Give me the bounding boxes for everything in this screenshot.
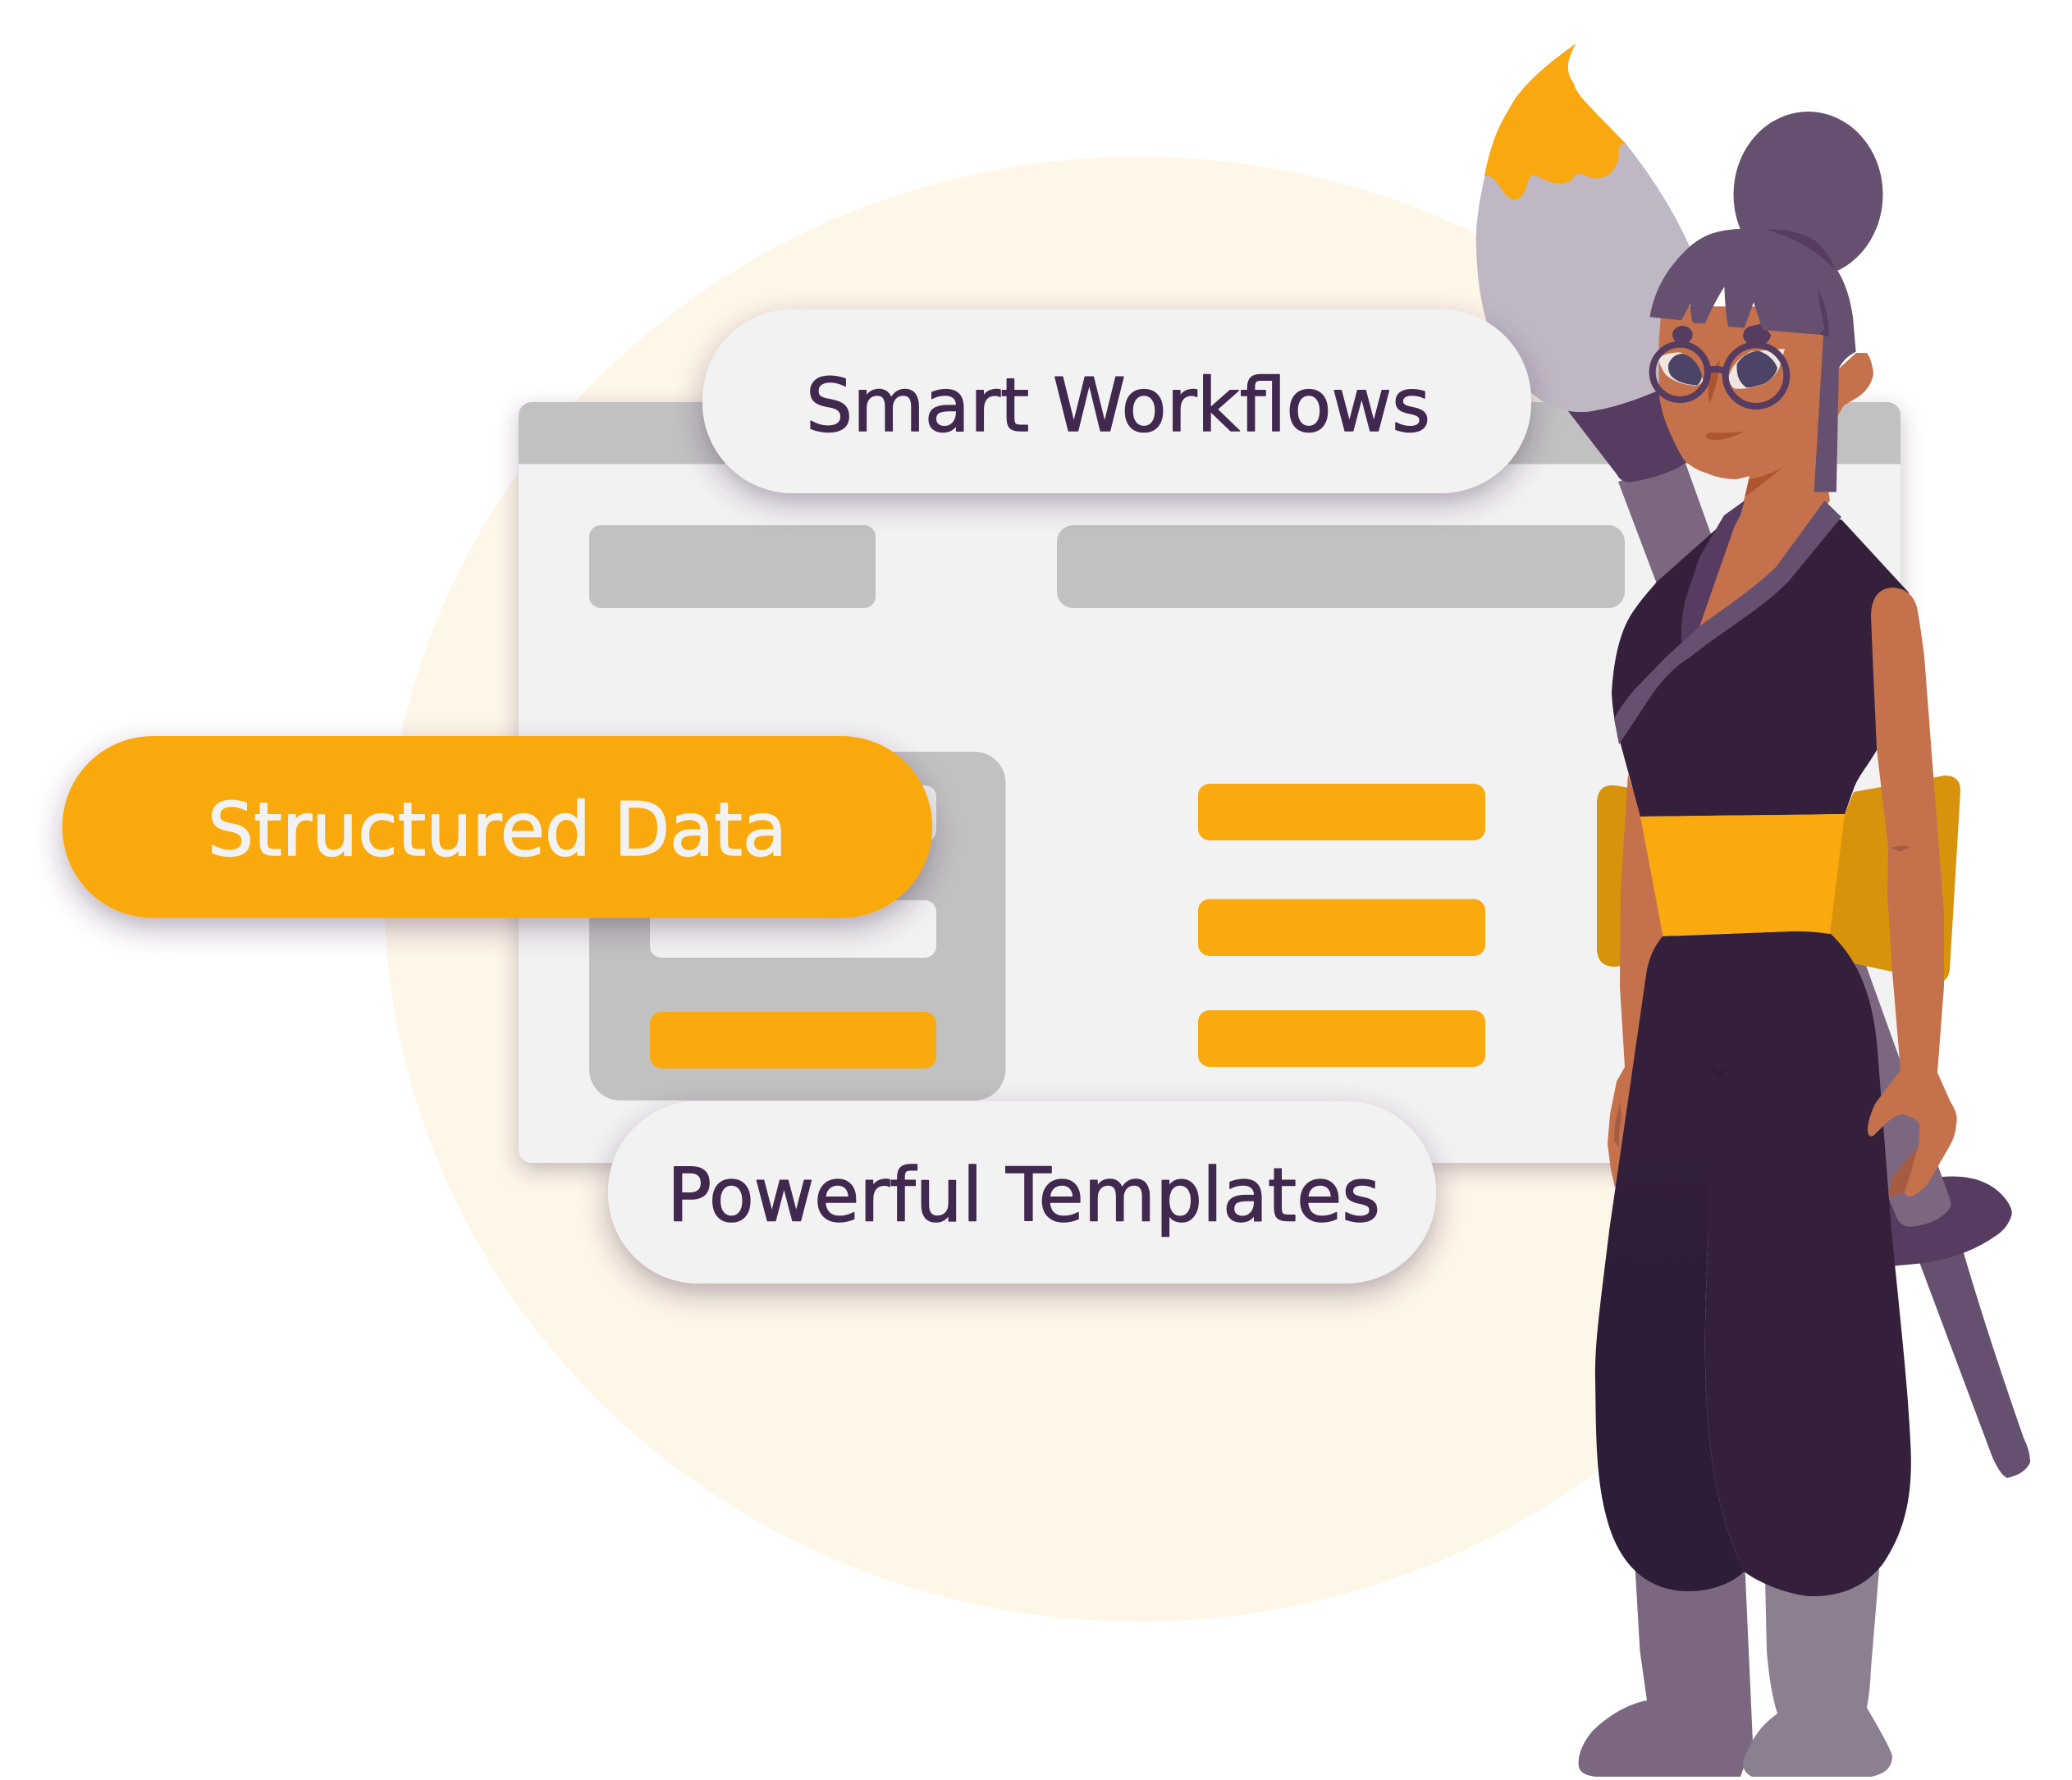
right eye [1729, 349, 1785, 389]
thumb shadow [1888, 1147, 1917, 1197]
header block right [1057, 525, 1625, 608]
kimono top [1612, 519, 1920, 817]
elbow crease [1891, 845, 1910, 852]
panel: app window [519, 402, 1900, 1163]
eyebrows [1672, 323, 1771, 346]
face and eyes [1653, 306, 1824, 496]
left pupil [1668, 354, 1702, 385]
pill: Structured Data [62, 736, 932, 917]
paintbrush [1476, 43, 2030, 1478]
window body [519, 402, 1900, 1163]
form card [589, 752, 1006, 1100]
right boot [1743, 1559, 1892, 1777]
neck shadow [1745, 468, 1782, 496]
right arm and hand [1868, 588, 1957, 1197]
character [1579, 112, 1960, 1777]
left hand shadow [1614, 1101, 1621, 1147]
right collar [1614, 501, 1841, 744]
header block left [589, 525, 876, 608]
sash bow left [1597, 785, 1649, 967]
glasses [1653, 345, 1786, 406]
mouth [1705, 432, 1745, 440]
label: Structured Data: Structured Data [208, 787, 787, 873]
left boot [1579, 1559, 1753, 1777]
left arm and hand [1608, 774, 1674, 1187]
brush orange paint [1484, 43, 1626, 199]
brush upper handle [1618, 459, 1951, 1227]
window title bar [519, 402, 1900, 464]
nose [1708, 360, 1720, 403]
ear [1838, 353, 1873, 415]
right pupil [1736, 351, 1777, 387]
neck and chest [1699, 443, 1830, 626]
left collar [1681, 501, 1745, 643]
waist sash [1640, 814, 1845, 936]
orange list rows [1198, 784, 1485, 1067]
left eye [1658, 352, 1703, 386]
face [1659, 306, 1824, 479]
background circle [384, 157, 1894, 1622]
hair shading top [1767, 229, 1836, 270]
brush bristles [1476, 43, 1723, 412]
sash bow right [1826, 776, 1960, 981]
label: Smart Workflows: Smart Workflows [806, 363, 1430, 449]
brush guard [1846, 1177, 2012, 1268]
label: Powerful Templates: Powerful Templates [667, 1152, 1380, 1239]
hair shading side [1818, 290, 1829, 337]
pill: Powerful Templates [608, 1101, 1436, 1284]
hair bun [1733, 112, 1882, 277]
crease mark [1702, 1059, 1737, 1078]
brush ferrule [1568, 378, 1690, 482]
brush lower handle [1917, 1247, 2030, 1478]
hair [1649, 229, 1856, 492]
pants right leg [1609, 931, 1911, 1596]
pants left leg [1595, 1100, 1745, 1591]
pill: Smart Workflows [702, 309, 1531, 493]
